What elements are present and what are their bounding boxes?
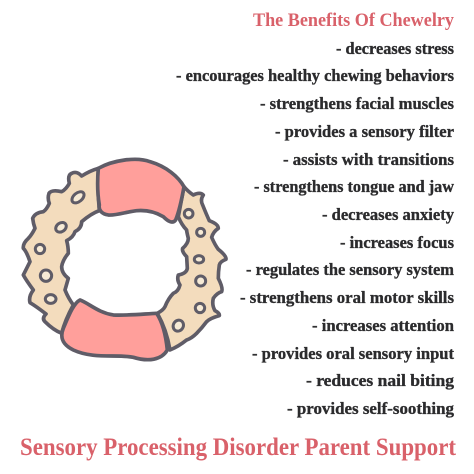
list item: - regulates the sensory system xyxy=(246,260,454,279)
list item: - provides oral sensory input xyxy=(252,344,454,363)
list item: - increases attention xyxy=(312,316,455,335)
list item: - decreases stress xyxy=(336,39,454,58)
benefits list xyxy=(176,39,455,418)
list item: - strengthens facial muscles xyxy=(260,94,454,113)
icon: chewelry teething ring xyxy=(23,159,226,360)
list item: - increases focus xyxy=(340,233,454,252)
list item: - strengthens tongue and jaw xyxy=(254,177,455,196)
list item: - decreases anxiety xyxy=(322,205,454,224)
list item: - assists with transitions xyxy=(283,150,454,169)
ring left beige section xyxy=(23,168,99,333)
ring right beige section xyxy=(157,187,226,350)
list item: - reduces nail biting xyxy=(306,371,455,390)
list item: - provides self-soothing xyxy=(287,399,454,418)
ring holes xyxy=(35,190,206,333)
list item: - strengthens oral motor skills xyxy=(240,288,454,307)
title: The Benefits Of Chewelry xyxy=(253,10,454,31)
list item: - provides a sensory filter xyxy=(275,122,454,141)
ring bottom pink section xyxy=(62,300,167,360)
list item: - encourages healthy chewing behaviors xyxy=(176,66,454,85)
ring top pink section xyxy=(98,159,184,222)
